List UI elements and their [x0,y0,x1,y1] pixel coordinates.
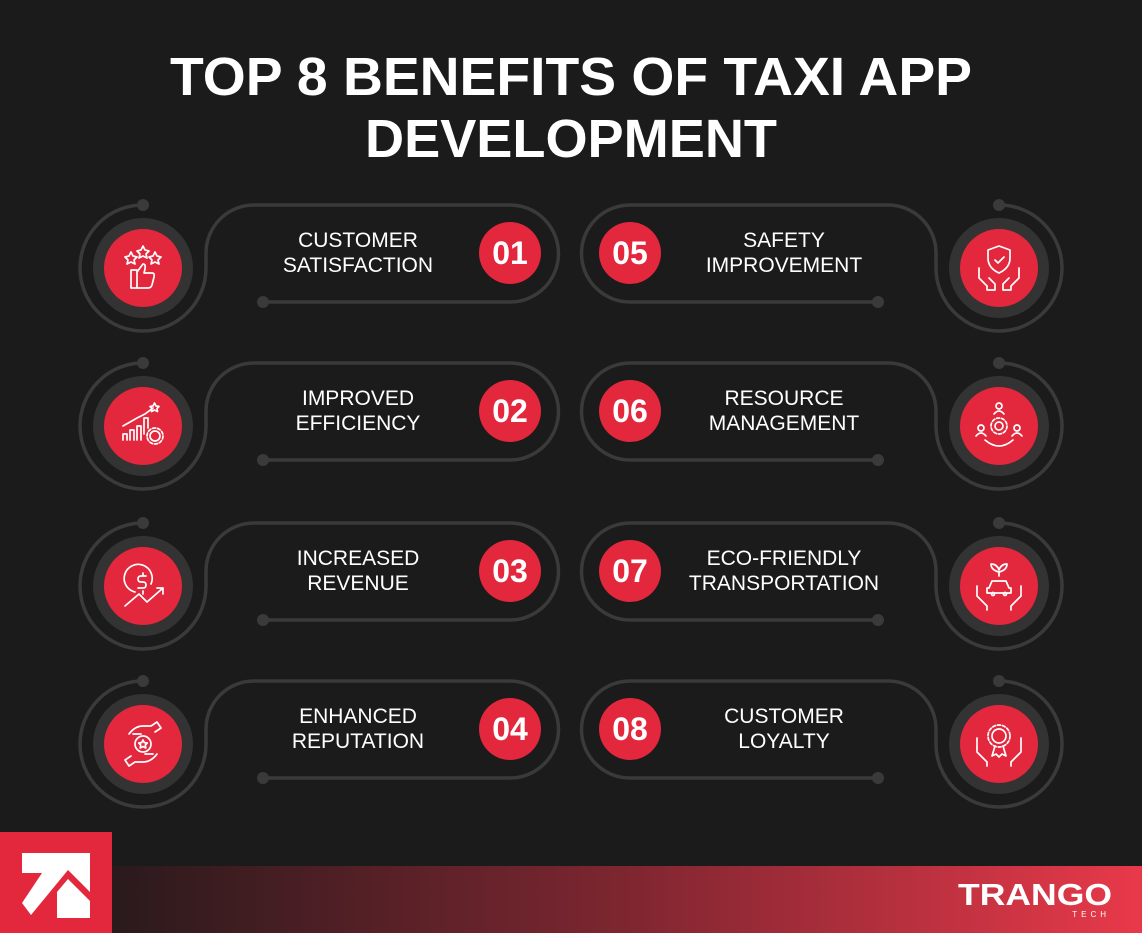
title: DEVELOPMENT [365,109,777,169]
number 03: 03 [492,553,528,589]
card 08: CUSTOMER [724,705,844,728]
card 06: MANAGEMENT [709,412,859,435]
card 02 [80,357,558,489]
card 03: REVENUE [307,572,409,595]
card 01 [80,199,558,331]
footer gradient band [112,866,1142,933]
title [170,47,972,169]
icon: hands star [125,722,161,766]
card 05: SAFETY [743,229,825,252]
number 05: 05 [612,235,648,271]
number 06: 06 [612,393,648,429]
card 06: RESOURCE [724,387,844,410]
number 05 [599,222,661,284]
icon: stars thumbs up [125,246,161,288]
title: TOP 8 BENEFITS OF TAXI APP [170,47,972,107]
number 02 [479,380,541,442]
card 03: INCREASED [297,547,419,570]
card 01: SATISFACTION [283,254,433,277]
number 01: 01 [492,235,528,271]
card 07 [582,517,1062,649]
brand logo: TRANGO [958,877,1112,912]
number 08: 08 [612,711,648,747]
card 07: TRANSPORTATION [689,572,879,595]
card 02: IMPROVED [302,387,414,410]
card 04: ENHANCED [299,705,417,728]
footer logo square [0,832,112,933]
card 04 [80,675,558,807]
icon: growth chart gear [123,403,163,444]
icon: car leaf hands [977,564,1021,610]
card 07: ECO-FRIENDLY [707,547,861,570]
number 08 [599,698,661,760]
card 03 [80,517,558,649]
icon: people gear [976,403,1022,446]
number 06 [599,380,661,442]
card 05: IMPROVEMENT [706,254,862,277]
number 07 [599,540,661,602]
number 02: 02 [492,393,528,429]
card 08: LOYALTY [738,730,830,753]
card 04: REPUTATION [292,730,424,753]
card 05 [582,199,1062,331]
number 04 [479,698,541,760]
icon: badge hands [977,725,1021,766]
card 08 [582,675,1062,807]
icon: shield hands [979,246,1019,290]
card 02: EFFICIENCY [296,412,420,435]
card 06 [582,357,1062,489]
brand logo: TECH [1072,910,1110,919]
icon: revenue dollar arrow [124,564,163,606]
number 07: 07 [612,553,648,589]
card 01: CUSTOMER [298,229,418,252]
number 03 [479,540,541,602]
number 01 [479,222,541,284]
number 04: 04 [492,711,528,747]
